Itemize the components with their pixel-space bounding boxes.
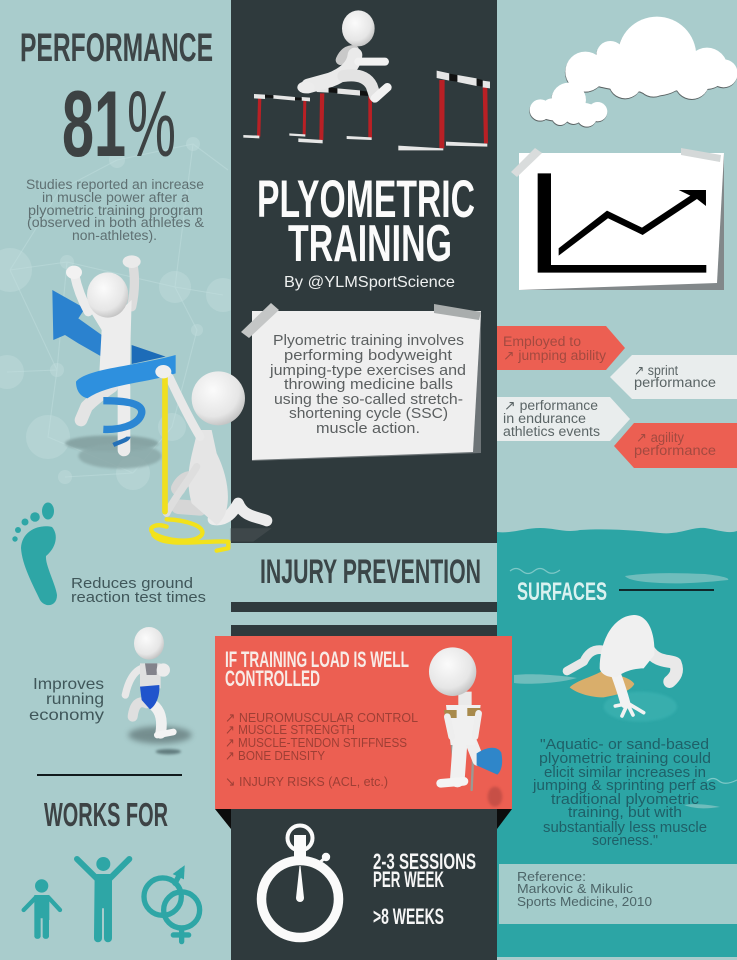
icon: stopwatch <box>262 826 338 938</box>
text: performance description: non-athletes). <box>72 228 157 243</box>
chart: rising line <box>538 173 706 273</box>
text: ground reaction: Reduces ground <box>71 575 193 592</box>
stat: 81%: % <box>127 71 176 176</box>
panel: dark lower column <box>231 809 497 960</box>
heading: if training load <box>225 647 409 691</box>
illustration: figure with rising arrow <box>52 255 176 469</box>
text: surfaces quote: "Aquatic- or sand-based <box>540 736 709 753</box>
heading: performance: PERFORMANCE <box>20 26 213 70</box>
text: surfaces quote: soreness." <box>592 832 658 849</box>
note card: definition: using the so-called stretch- <box>274 392 463 408</box>
heading: injury prevention: INJURY PREVENTION <box>260 553 481 591</box>
text: performance description: (observed in both athletes & <box>27 215 204 230</box>
list: benefits: ↗ MUSCLE-TENDON STIFFNESS <box>225 735 407 750</box>
list: benefits: ↘ INJURY RISKS (ACL, etc.) <box>225 774 388 789</box>
text: sessions per week: 2-3 SESSIONS <box>373 849 476 874</box>
text: surfaces quote: elicit similar increases in <box>544 764 706 781</box>
illustration: figure on crutches <box>429 647 502 807</box>
heading: if training load: IF TRAINING LOAD IS WELL <box>225 647 409 672</box>
icon: footprint <box>12 502 57 605</box>
note card: definition: shortening cycle (SSC) <box>289 406 448 422</box>
text: surfaces quote <box>532 736 716 849</box>
panel: reference: Sports Medicine, 2010 <box>517 894 652 909</box>
icon: gender symbols <box>144 867 200 942</box>
arrow tag: agility performance <box>614 423 737 468</box>
panel: dark centre column <box>231 0 497 543</box>
panel: water background <box>497 528 737 957</box>
text: ground reaction <box>71 575 206 606</box>
note card: definition: performing bodyweight <box>284 348 452 364</box>
note card: definition: Plyometric training involves <box>273 333 464 349</box>
note card: definition: muscle action. <box>316 421 420 437</box>
panel: injury prevention <box>215 636 512 829</box>
arrow tag: endurance performance <box>497 397 630 441</box>
text: surfaces quote: training, but with <box>568 804 682 821</box>
note card: line chart <box>511 148 724 290</box>
arrow tag: endurance performance: in endurance <box>503 411 586 426</box>
arrow tag: jumping ability: Employed to <box>503 334 581 349</box>
hurdler illustration <box>243 10 490 150</box>
arrow tag: jumping ability: ↗ jumping ability <box>503 348 606 363</box>
text: surfaces quote: traditional plyometric <box>551 791 700 808</box>
stat: 81%: 81 <box>62 71 126 176</box>
panel: reference: Markovic & Mikulic <box>517 881 634 896</box>
byline: By @YLMSportScience <box>284 274 455 291</box>
text: surfaces quote: substantially less muscle <box>543 819 707 836</box>
text: performance description: plyometric training program <box>28 203 203 218</box>
arrow tag: sprint performance: ↗ sprint <box>634 363 678 378</box>
text: surfaces quote: plyometric training could <box>539 750 711 767</box>
heading: surfaces: SURFACES <box>517 578 607 606</box>
arrow tag: sprint performance: performance <box>634 375 716 390</box>
arrow tag: jumping ability <box>497 326 625 370</box>
text: sessions per week: >8 WEEKS <box>373 904 444 929</box>
text: running economy <box>29 676 104 724</box>
illustration: runner <box>125 627 192 754</box>
text: running economy: running <box>46 691 104 708</box>
note card: definition: throwing medicine balls <box>284 377 453 393</box>
illustration: figure bent over sand <box>567 615 677 722</box>
illustration: clouds <box>530 17 737 127</box>
list: benefits: ↗ BONE DENSITY <box>225 748 325 763</box>
text: sessions per week <box>373 849 476 929</box>
arrow tag: endurance performance: ↗ performance <box>504 398 598 413</box>
text: surfaces quote: jumping & sprinting perf as <box>532 777 716 794</box>
note card: definition: jumping-type exercises and <box>269 363 466 379</box>
text: performance description: in muscle power after a <box>42 190 190 205</box>
text: performance description: Studies reported an increase <box>26 177 204 192</box>
icons: child, adult, gender <box>24 857 200 942</box>
title <box>257 170 475 273</box>
title: PLYOMETRIC <box>257 170 475 229</box>
arrow tag: endurance performance: athletics events <box>503 424 600 439</box>
title: TRAINING <box>288 215 452 273</box>
text: performance description <box>26 177 204 243</box>
heading: if training load: CONTROLLED <box>225 666 320 691</box>
list: benefits <box>225 710 418 789</box>
list: benefits: ↗ NEUROMUSCULAR CONTROL <box>225 710 418 725</box>
arrow tag: agility performance: performance <box>634 443 716 458</box>
arrow tag: sprint performance <box>610 355 737 399</box>
text: sessions per week: PER WEEK <box>373 867 444 892</box>
illustration: kneeling figure with measuring tape <box>151 365 272 551</box>
panel: reference: Reference: <box>517 869 586 884</box>
text: running economy: Improves <box>33 676 104 693</box>
icon: adult <box>77 857 129 942</box>
panel: reference <box>499 864 737 924</box>
text: ground reaction: reaction test times <box>71 589 206 606</box>
icon: child <box>24 879 60 939</box>
list: benefits: ↗ MUSCLE STRENGTH <box>225 722 355 737</box>
arrow tag: agility performance: ↗ agility <box>636 430 684 445</box>
text: running economy: economy <box>29 707 104 724</box>
note card: definition <box>241 303 481 461</box>
heading: works for: WORKS FOR <box>44 796 168 833</box>
